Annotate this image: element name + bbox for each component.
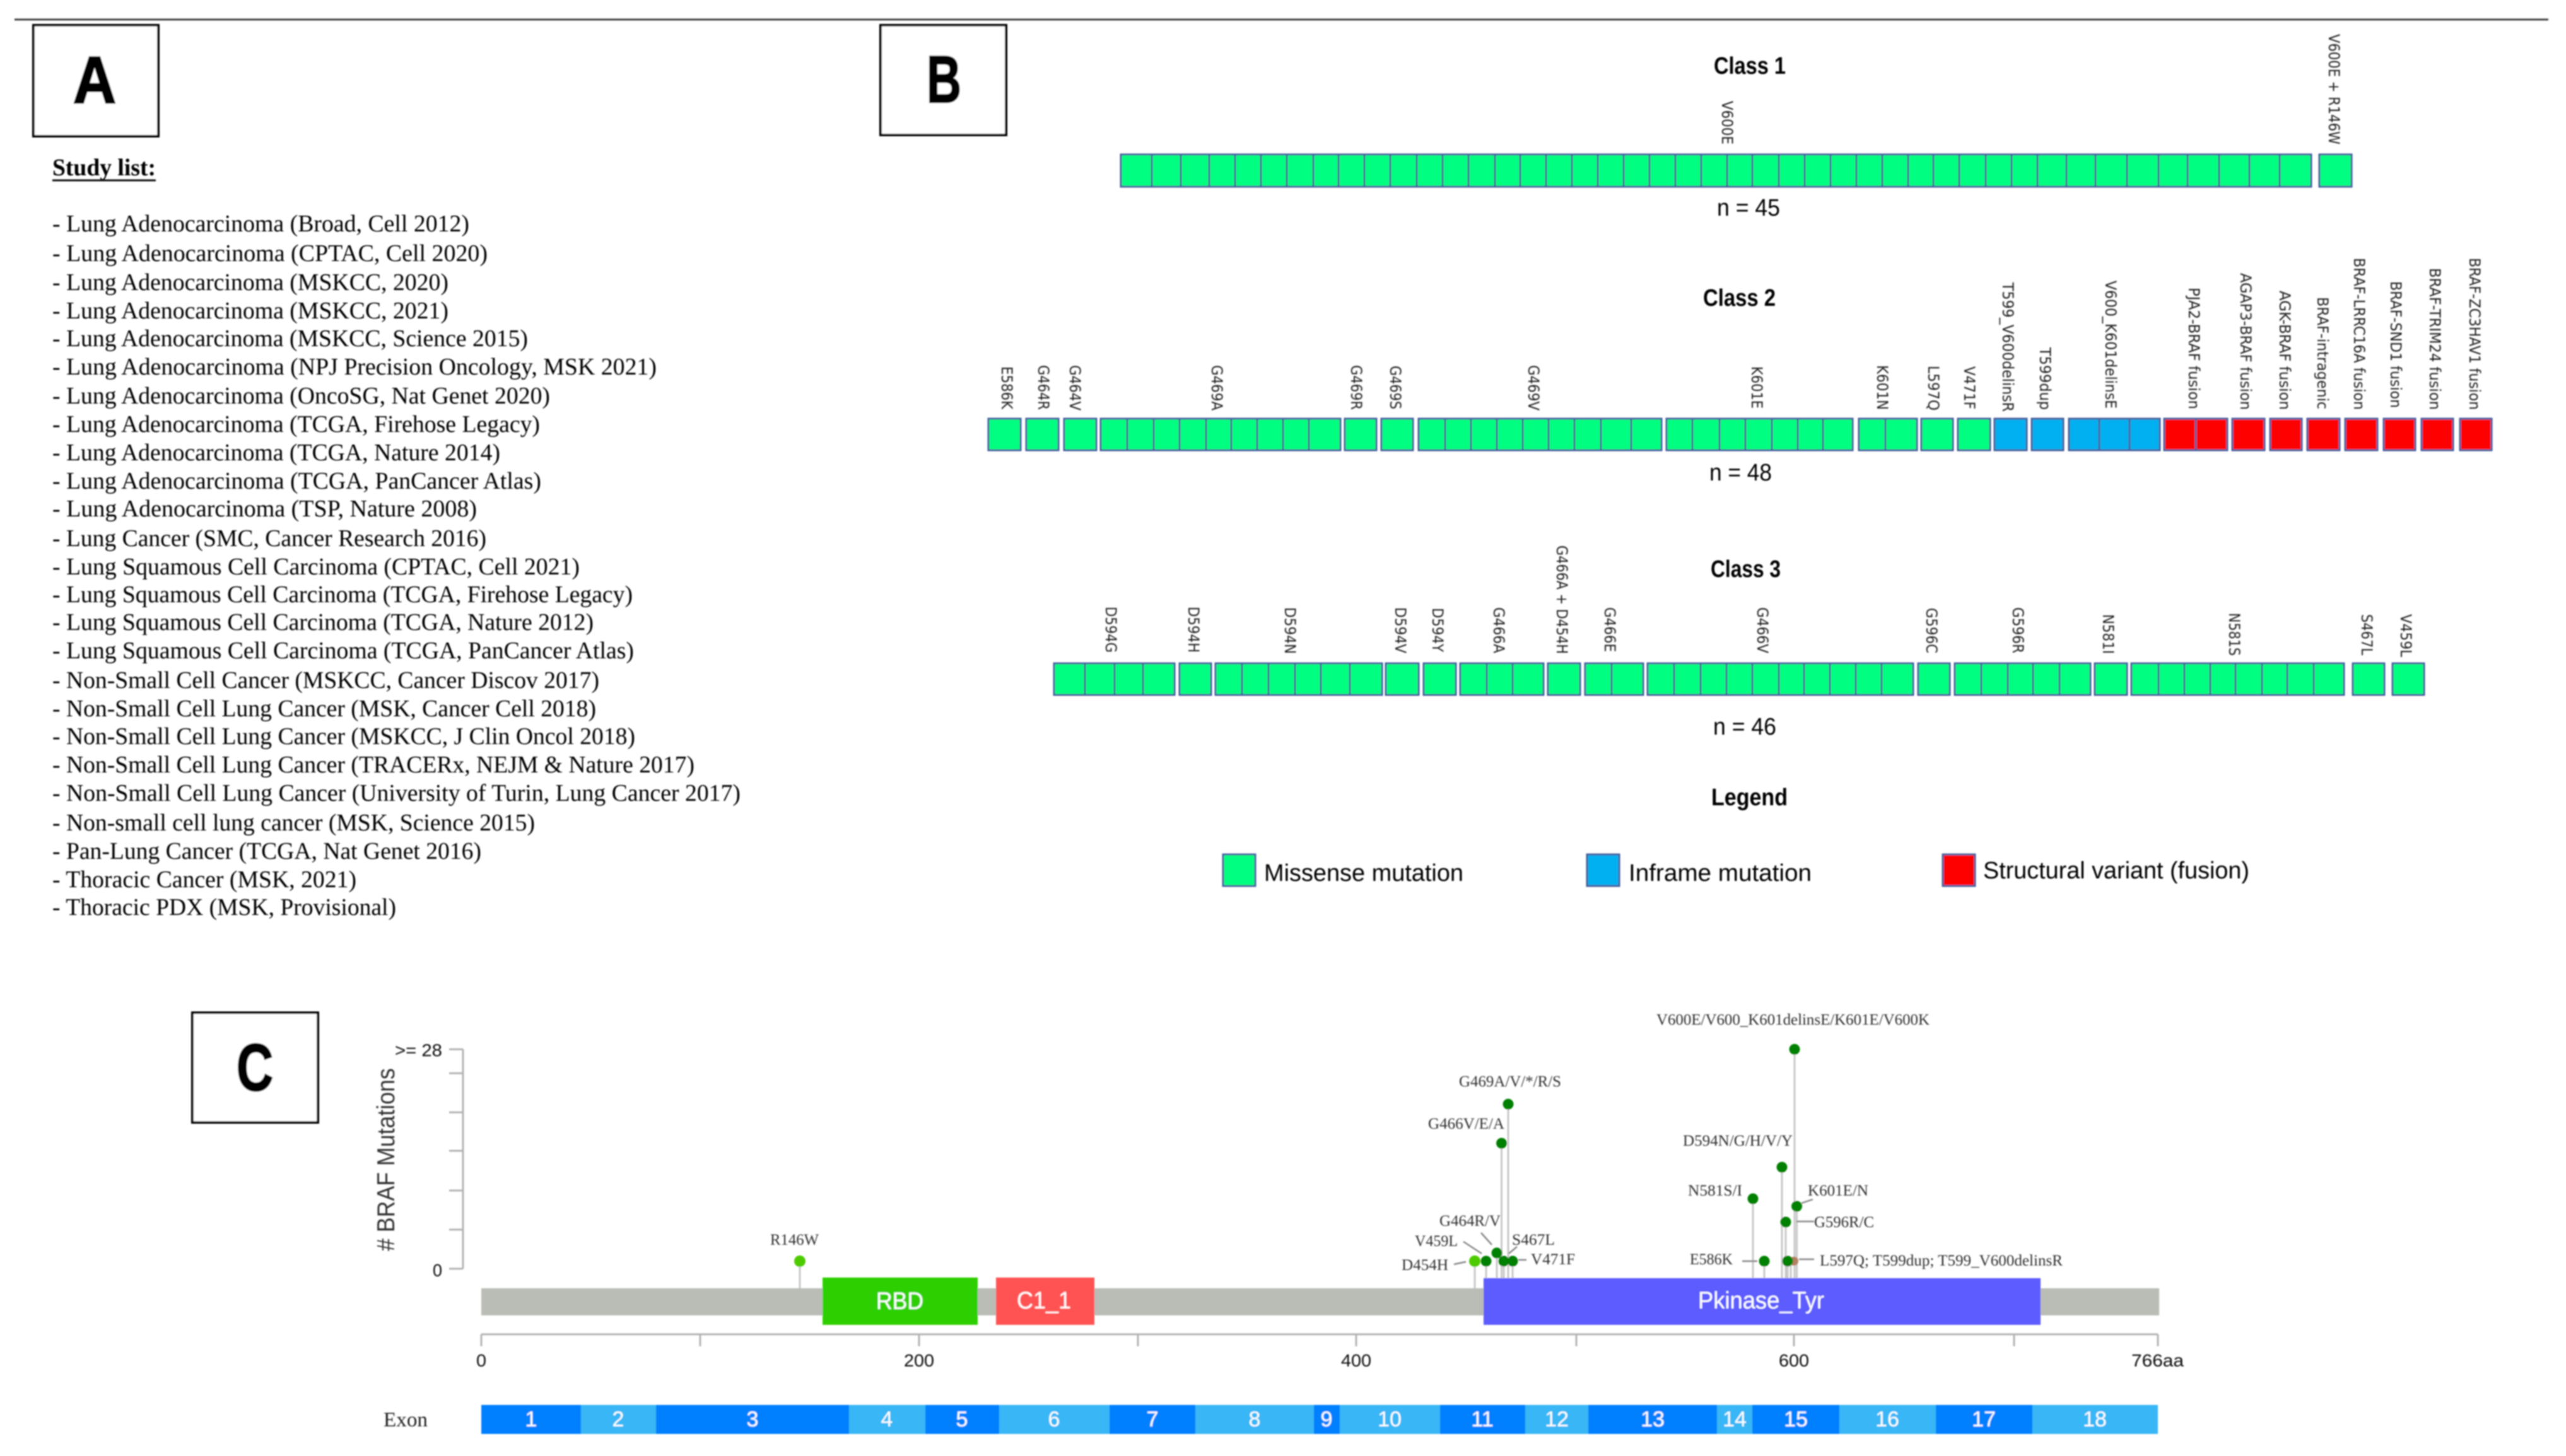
- exon track: 2: [612, 1407, 624, 1431]
- mutation labels: class 2: L597Q: [1924, 366, 1942, 411]
- mutation labels: L597Q; T599dup; T599_V600delinsR: [1820, 1252, 2063, 1269]
- heading: Class 1: Class 1: [1714, 53, 1786, 79]
- text block: list of studies: - Non-Small Cell Cancer (MSKCC, Cancer Discov 2017): [52, 667, 599, 694]
- mutation labels: class 2: G469V: [1525, 365, 1542, 411]
- sample count: class 3: n = 46: [1713, 714, 1776, 740]
- panel label A: [33, 25, 158, 136]
- mutation labels: class 3: D594G: [1102, 607, 1120, 653]
- mutation labels: class 2: PJA2-BRAF fusion: [2185, 288, 2203, 409]
- mutation labels: class 2: T599dup: [2036, 347, 2054, 410]
- text block: list of studies: - Lung Adenocarcinoma (CPTAC, Cell 2020): [52, 240, 488, 267]
- sample bar: class 3: [1054, 663, 2424, 695]
- mutation labels: D594N/G/H/V/Y: [1683, 1133, 1793, 1150]
- exon track: Exon: [384, 1409, 428, 1431]
- mutation labels: [770, 1011, 2063, 1274]
- lollipop heads: [794, 1044, 1802, 1267]
- legend item: missense: Missense mutation: [1264, 860, 1463, 887]
- heading: study list: Study list:: [52, 154, 156, 181]
- mutation labels: R146W: [770, 1232, 819, 1249]
- mutation labels: class 2: E586K: [998, 366, 1016, 410]
- mutation labels: class 3: N581I: [2099, 614, 2117, 654]
- mutation labels: class 2: BRAF-SND1 fusion: [2387, 281, 2405, 408]
- mutation labels: class 1: [1718, 34, 2343, 144]
- mutation labels: class 2: BRAF-LRRC16A fusion: [2350, 258, 2368, 410]
- exon track: [384, 1405, 2158, 1434]
- legend item: inframe: Inframe mutation: [1629, 860, 1812, 887]
- mutation labels: G469A/V/*/R/S: [1459, 1073, 1561, 1090]
- mutation labels: G596R/C: [1814, 1214, 1874, 1231]
- text block: list of studies: - Lung Adenocarcinoma (TCGA, Nature 2014): [52, 440, 500, 466]
- text block: list of studies: - Lung Squamous Cell Carcinoma (TCGA, Firehose Legacy): [52, 581, 633, 608]
- exon track: 18: [2083, 1407, 2107, 1431]
- mutation labels: class 2: BRAF-ZC3HAV1 fusion: [2466, 258, 2483, 410]
- x axis: 766aa: [2131, 1351, 2184, 1370]
- mutation labels: class 2: K601N: [1873, 365, 1891, 410]
- domain: C1_1: C1_1: [1017, 1288, 1071, 1314]
- exon track: 8: [1249, 1407, 1260, 1431]
- legend item: fusion: Structural variant (fusion): [1983, 858, 2249, 884]
- y axis: [373, 1040, 463, 1280]
- text block: list of studies: - Lung Adenocarcinoma (OncoSG, Nat Genet 2020): [52, 383, 550, 409]
- mutation labels: V600E/V600_K601delinsE/K601E/V600K: [1656, 1011, 1930, 1028]
- mutation labels: class 2: V600_K601delinsE: [2102, 281, 2119, 409]
- text block: list of studies: - Lung Adenocarcinoma (MSKCC, 2021): [52, 298, 448, 324]
- mutation labels: class 2: G469A: [1208, 365, 1226, 411]
- exon track: 1: [525, 1407, 537, 1431]
- protein backbone: [481, 1288, 2159, 1315]
- text block: list of studies: - Thoracic Cancer (MSK, 2021): [52, 866, 356, 893]
- mutation labels: class 2: G469R: [1347, 365, 1365, 410]
- mutation labels: class 1: V600E + R146W: [2325, 34, 2343, 144]
- mutation labels: class 3: G596R: [2009, 607, 2027, 653]
- mutation labels: N581S/I: [1688, 1182, 1742, 1199]
- leader lines: [1454, 1199, 1814, 1264]
- text block: list of studies: - Non-Small Cell Lung Cancer (TRACERx, NEJM & Nature 2017): [52, 752, 694, 778]
- x axis: 600: [1779, 1351, 1809, 1370]
- panel label B: B: [927, 43, 961, 117]
- legend item: inframe: [1587, 854, 1812, 887]
- exon track: 5: [956, 1407, 968, 1431]
- sample bar: class 2: [988, 419, 2492, 450]
- mutation labels: V471F: [1531, 1251, 1575, 1268]
- x axis: [476, 1334, 2184, 1370]
- text block: list of studies: - Lung Squamous Cell Carcinoma (CPTAC, Cell 2021): [52, 554, 580, 580]
- x axis: 400: [1341, 1351, 1371, 1370]
- domain: Pkinase_Tyr: Pkinase_Tyr: [1698, 1288, 1824, 1314]
- exon track: 4: [881, 1407, 893, 1431]
- text block: list of studies: - Lung Squamous Cell Carcinoma (TCGA, PanCancer Atlas): [52, 638, 634, 664]
- mutation labels: class 3: G596C: [1923, 608, 1940, 653]
- domain: Pkinase_Tyr: [1484, 1278, 2041, 1325]
- panel label C: C: [237, 1031, 273, 1105]
- mutation labels: class 1: V600E: [1718, 101, 1736, 144]
- exon track: 7: [1147, 1407, 1158, 1431]
- exon track: 15: [1784, 1407, 1808, 1431]
- mutation labels: class 3: D594V: [1391, 607, 1409, 654]
- mutation labels: G464R/V: [1439, 1213, 1501, 1230]
- text block: list of studies: - Non-Small Cell Lung Cancer (MSKCC, J Clin Oncol 2018): [52, 723, 635, 750]
- x axis: 0: [476, 1351, 486, 1370]
- text block: list of studies: - Lung Adenocarcinoma (TCGA, Firehose Legacy): [52, 411, 540, 438]
- heading: Class 3: Class 3: [1711, 556, 1781, 583]
- mutation labels: K601E/N: [1808, 1182, 1868, 1199]
- legend: [1223, 784, 2249, 887]
- mutation labels: class 3: N581S: [2225, 613, 2243, 656]
- mutation labels: class 3: G466V: [1754, 607, 1771, 654]
- text block: list of studies: - Pan-Lung Cancer (TCGA, Nat Genet 2016): [52, 838, 481, 865]
- panel label C: [192, 1013, 318, 1122]
- mutation labels: class 2: G464R: [1034, 365, 1052, 410]
- y axis: >= 28: [395, 1040, 442, 1060]
- mutation labels: D454H: [1402, 1257, 1448, 1274]
- mutation labels: G466V/E/A: [1428, 1115, 1504, 1133]
- mutation labels: class 3: G466E: [1601, 607, 1619, 652]
- text block: list of studies: - Lung Adenocarcinoma (NPJ Precision Oncology, MSK 2021): [52, 354, 657, 380]
- heading: Class 2: Class 2: [1703, 285, 1776, 312]
- mutation labels: E586K: [1690, 1251, 1733, 1268]
- mutation labels: class 2: BRAF-TRIM24 fusion: [2426, 268, 2444, 410]
- mutation labels: class 2: G469S: [1386, 366, 1404, 409]
- text block: list of studies: [52, 211, 741, 921]
- text block: list of studies: - Lung Adenocarcinoma (MSKCC, 2020): [52, 269, 448, 296]
- heading: legend: Legend: [1711, 784, 1788, 811]
- text block: list of studies: - Lung Squamous Cell Carcinoma (TCGA, Nature 2012): [52, 609, 594, 636]
- mutation labels: class 3: D594N: [1281, 607, 1299, 654]
- mutation labels: class 2: BRAF-intragenic: [2314, 297, 2331, 409]
- panel B: class 2: [988, 258, 2492, 486]
- mutation labels: class 2: [998, 258, 2483, 412]
- domain: RBD: [823, 1278, 978, 1325]
- sample count: class 1: n = 45: [1717, 195, 1780, 221]
- panel A: study list: [52, 154, 741, 921]
- sample bar: class 1: [1121, 154, 2352, 187]
- sample count: class 2: n = 48: [1709, 460, 1772, 486]
- text block: list of studies: - Non-small cell lung cancer (MSK, Science 2015): [52, 810, 535, 836]
- exon track: 11: [1471, 1407, 1494, 1431]
- mutation labels: class 3: D594H: [1185, 607, 1202, 653]
- mutation labels: class 3: G466A + D454H: [1553, 545, 1571, 654]
- mutation labels: S467L: [1512, 1232, 1555, 1249]
- text block: list of studies: - Non-Small Cell Lung Cancer (MSK, Cancer Cell 2018): [52, 696, 596, 722]
- mutation labels: class 2: G464V: [1066, 365, 1084, 411]
- exon track: 13: [1641, 1407, 1665, 1431]
- text block: list of studies: - Lung Adenocarcinoma (TSP, Nature 2008): [52, 496, 477, 522]
- domain: C1_1: [996, 1278, 1094, 1325]
- mutation labels: class 3: S467L: [2358, 614, 2376, 656]
- panel label B: [881, 25, 1006, 135]
- exon track: 14: [1723, 1407, 1747, 1431]
- panel C: lollipop plot: [373, 1011, 2184, 1434]
- domain: RBD: RBD: [876, 1288, 923, 1315]
- mutation labels: class 2: AGK-BRAF fusion: [2276, 291, 2294, 410]
- panel B: class 3: [1054, 545, 2424, 740]
- exon track: 10: [1378, 1407, 1402, 1431]
- mutation labels: class 2: V471F: [1960, 366, 1978, 409]
- text block: list of studies: - Lung Adenocarcinoma (Broad, Cell 2012): [52, 211, 469, 237]
- exon track: 12: [1545, 1407, 1569, 1431]
- text block: list of studies: - Lung Adenocarcinoma (MSKCC, Science 2015): [52, 325, 528, 352]
- exon track: 6: [1048, 1407, 1060, 1431]
- legend item: missense: [1223, 854, 1463, 887]
- y axis: # BRAF Mutations: [373, 1068, 400, 1251]
- mutation labels: class 3: [1102, 545, 2415, 658]
- mutation labels: class 2: AGAP3-BRAF fusion: [2237, 273, 2254, 410]
- exon track: 16: [1875, 1407, 1899, 1431]
- text block: list of studies: - Thoracic PDX (MSK, Provisional): [52, 894, 396, 921]
- text block: list of studies: - Lung Adenocarcinoma (TCGA, PanCancer Atlas): [52, 468, 541, 494]
- mutation labels: class 3: V459L: [2397, 614, 2415, 658]
- lollipop stems: [800, 1049, 1796, 1288]
- exon track: 3: [747, 1407, 758, 1431]
- mutation labels: class 2: K601E: [1748, 366, 1766, 409]
- mutation labels: class 3: G466A: [1490, 607, 1508, 654]
- text block: list of studies: - Non-Small Cell Lung Cancer (University of Turin, Lung Cancer 2017): [52, 780, 741, 807]
- mutation labels: class 3: D594Y: [1429, 608, 1446, 652]
- exon track: 17: [1972, 1407, 1996, 1431]
- y axis: 0: [433, 1261, 442, 1280]
- x axis: 200: [904, 1351, 934, 1370]
- exon track: 9: [1321, 1407, 1332, 1431]
- panel label A: A: [73, 44, 116, 117]
- mutation labels: class 2: T599_V600delinsR: [1999, 282, 2017, 412]
- mutation labels: V459L: [1415, 1233, 1458, 1250]
- text block: list of studies: - Lung Cancer (SMC, Cancer Research 2016): [52, 525, 486, 552]
- panel B: class 1: [1121, 34, 2352, 221]
